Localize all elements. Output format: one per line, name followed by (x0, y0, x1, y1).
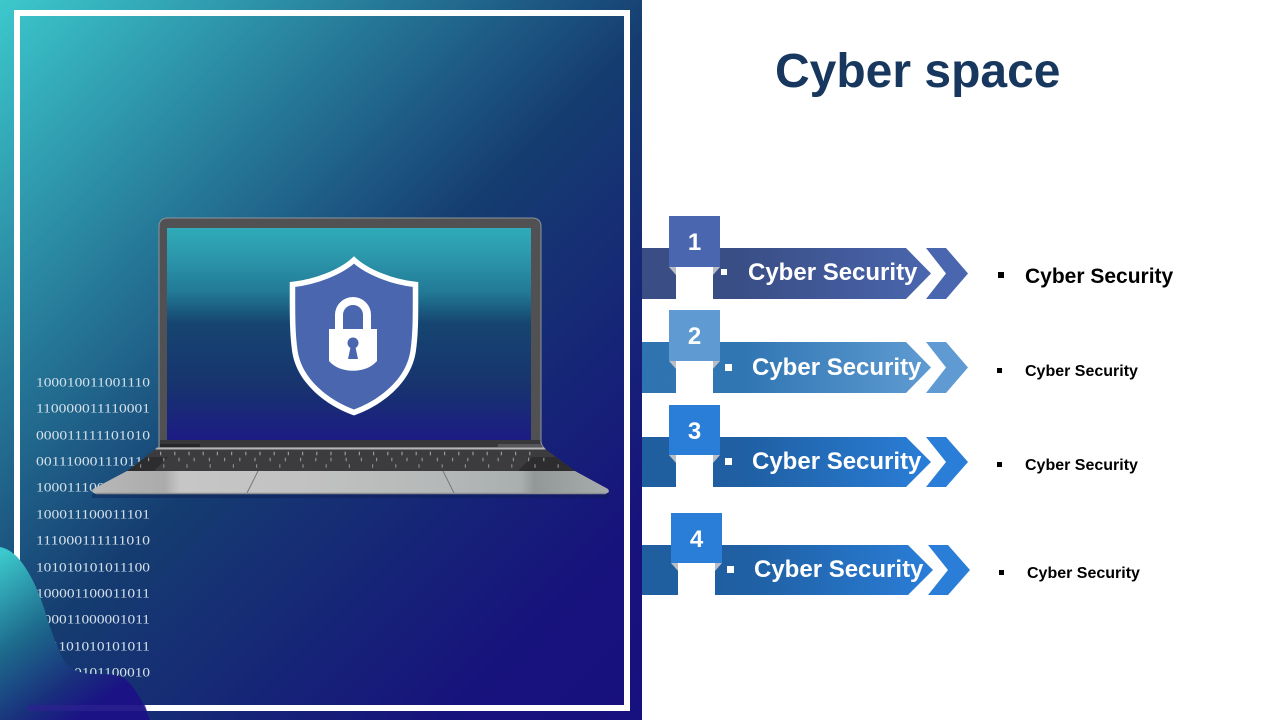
number badge 4 (671, 513, 722, 563)
number badge 3 (669, 405, 720, 455)
chevron 4 (928, 545, 970, 595)
number badge 4: 4 (690, 526, 704, 553)
row 1: description: Cyber Security (1025, 265, 1174, 288)
chevron 2 (926, 342, 968, 393)
laptop hinge (160, 440, 540, 447)
binary code text block: 101010101100010 (36, 664, 150, 680)
binary code text block: 100001100011011 (36, 586, 150, 600)
row 2: numbered arrow banner (642, 310, 968, 393)
row 3: numbered arrow banner (642, 405, 968, 487)
banner label 2: Cyber Security (752, 354, 922, 381)
number badge 1: 1 (688, 229, 701, 256)
number badge 2 (669, 310, 720, 361)
number badge 3: 3 (688, 418, 701, 445)
laptop illustration (92, 218, 609, 498)
white frame (17, 13, 627, 708)
row 3: description: Cyber Security (1025, 457, 1138, 474)
banner label 1: Cyber Security (748, 259, 918, 286)
title: Cyber space (775, 45, 1060, 98)
row 4: numbered arrow banner (642, 513, 970, 595)
chevron 1 (926, 248, 968, 299)
binary code text block: 111000111111010 (36, 532, 150, 548)
laptop silver base (92, 471, 609, 498)
decorative blob bottom-left (0, 547, 150, 720)
binary code text block: 110000011110001 (36, 400, 150, 416)
shield with padlock icon (292, 260, 416, 412)
laptop lid and bezel (159, 218, 544, 448)
row 4: description: Cyber Security (1027, 565, 1140, 582)
binary code text block: 100011100011101 (36, 480, 150, 494)
row 1: numbered arrow banner (642, 216, 968, 299)
chevron 3 (926, 437, 968, 487)
laptop screen (167, 228, 531, 440)
number badge 2: 2 (688, 323, 701, 350)
binary code text block: 101101010101011 (36, 638, 150, 654)
binary code text block: 100010011001110 (36, 374, 150, 390)
binary code text block: 100011000001011 (36, 612, 150, 626)
number badge 1 (669, 216, 720, 267)
laptop keyboard deck (127, 448, 575, 471)
binary code text block: 101010101011100 (36, 560, 150, 574)
binary code text block (36, 374, 150, 680)
binary code text block: 100011100011101 (36, 506, 150, 522)
binary code text block: 000011111101010 (36, 428, 150, 442)
row 2: description: Cyber Security (1025, 363, 1138, 380)
panel: left gradient background (0, 0, 642, 720)
banner label 4: Cyber Security (754, 556, 924, 583)
binary code text block: 001110001110111 (36, 454, 150, 468)
banner label 3: Cyber Security (752, 448, 922, 475)
